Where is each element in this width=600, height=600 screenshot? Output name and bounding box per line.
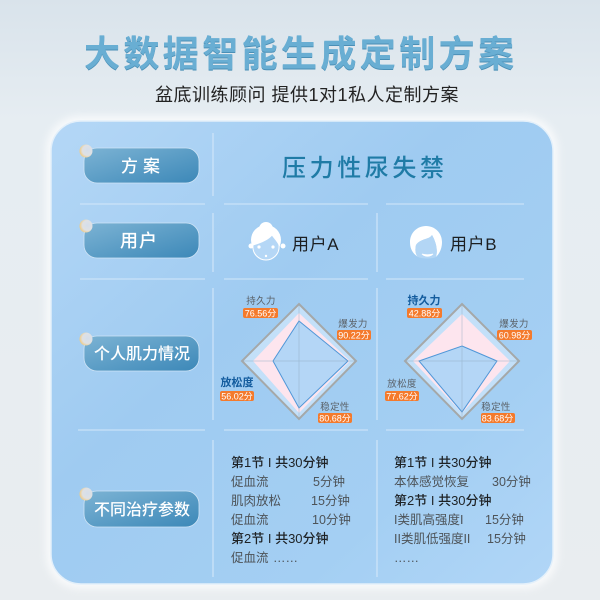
treatment parameters: user B: 本体感觉恢复 [394, 474, 470, 489]
treatment parameters: user A: 第2节 I 共30分钟 [231, 531, 329, 546]
radar chart: user A [242, 304, 356, 419]
radar labels: user B: 60.98分 [499, 330, 530, 340]
radar labels: user B: 放松度 [387, 378, 417, 390]
treatment parameters: user B: …… [394, 551, 419, 565]
treatment parameters: user B: 15分钟 [485, 512, 524, 527]
button: 用户: 用户 [120, 231, 158, 251]
radar labels: user B: 稳定性 [481, 401, 511, 413]
button: 用户 [80, 220, 199, 258]
treatment parameters: user A: …… [273, 551, 298, 565]
heading: 压力性尿失禁: 压力性尿失禁 [282, 155, 448, 182]
radar labels: user B: 83.68分 [482, 414, 513, 424]
button: 不同治疗参数 [80, 488, 199, 527]
button: 不同治疗参数: 不同治疗参数 [94, 500, 190, 519]
radar labels: user A: 56.02分 [221, 392, 253, 402]
radar labels: user A: 爆发力 [338, 318, 368, 330]
icon: user B face [410, 226, 442, 258]
treatment parameters: user A: 第1节 I 共30分钟 [231, 455, 329, 470]
radar labels: user A: 80.68分 [319, 414, 351, 424]
treatment parameters: user B [394, 455, 531, 565]
radar labels: user B: 77.62分 [386, 392, 418, 402]
radar labels: user A: 90.22分 [338, 330, 370, 340]
radar labels: user B: 42.88分 [409, 308, 440, 318]
treatment parameters: user A: 促血流 [231, 475, 269, 489]
treatment parameters: user B: I类肌高强度I [394, 512, 463, 527]
treatment parameters: user B: 第2节 I 共30分钟 [394, 493, 492, 508]
title: 大数据智能生成定制方案 [84, 33, 517, 74]
panel: comparison table [46, 116, 558, 589]
radar labels: user B: 爆发力 [499, 318, 529, 330]
treatment parameters: user B: 15分钟 [487, 531, 526, 546]
radar chart: user B [405, 304, 519, 419]
radar labels: user A: 76.56分 [245, 308, 276, 318]
treatment parameters: user A: 5分钟 [313, 474, 345, 489]
button: 个人肌力情况: 个人肌力情况 [94, 345, 190, 363]
radar labels: user A [220, 295, 371, 424]
subtitle: 盆底训练顾问 提供1对1私人定制方案 [155, 85, 459, 105]
treatment parameters: user A: 肌肉放松 [231, 493, 281, 508]
treatment parameters: user A: 促血流 [231, 551, 269, 565]
radar labels: user B [385, 293, 532, 424]
radar labels: user A: 持久力 [246, 295, 276, 307]
treatment parameters: user B: 第1节 I 共30分钟 [394, 455, 492, 470]
button: 个人肌力情况 [80, 332, 199, 371]
radar labels: user A: 稳定性 [320, 401, 350, 413]
button: 方案: 方案 [121, 156, 165, 176]
treatment parameters: user A [231, 455, 351, 565]
treatment parameters: user A: 15分钟 [311, 493, 350, 508]
label: 用户A: 用户A [292, 235, 339, 254]
treatment parameters: user A: 促血流 [231, 513, 269, 527]
treatment parameters: user A: 10分钟 [312, 512, 351, 527]
button: 方案 [80, 144, 199, 183]
radar labels: user B: 持久力 [408, 293, 440, 307]
treatment parameters: user B: II类肌低强度II [394, 531, 470, 546]
radar labels: user A: 放松度 [220, 375, 254, 389]
treatment parameters: user B: 30分钟 [492, 474, 531, 489]
label: 用户B: 用户B [450, 235, 497, 254]
icon: user A face [248, 222, 286, 260]
